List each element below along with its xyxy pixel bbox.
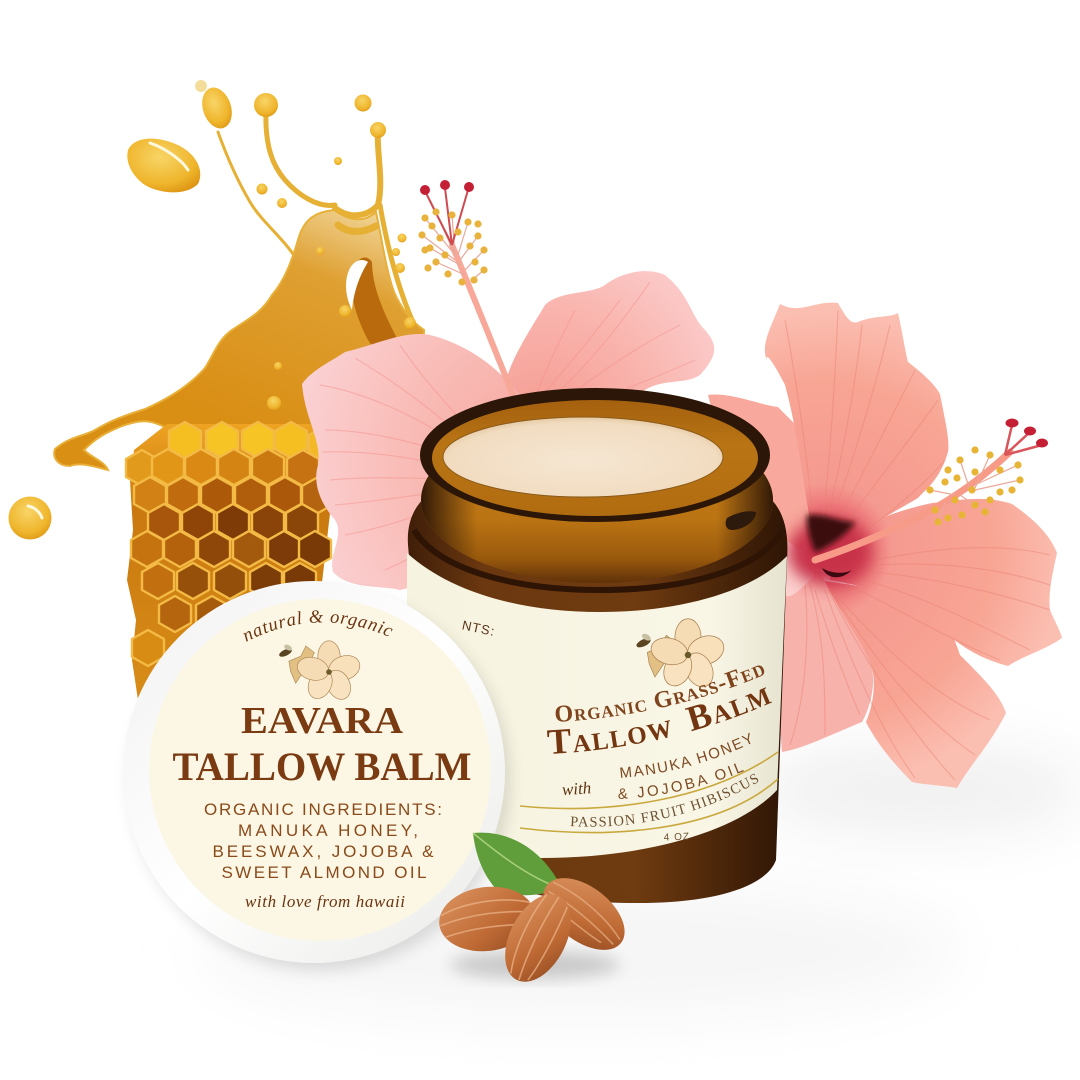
frill	[785, 540, 815, 596]
ingredients list: ORGANIC INGREDIENTS:	[204, 800, 442, 819]
jar body	[408, 488, 787, 903]
left hibiscus flower	[302, 180, 714, 590]
lid label	[149, 599, 491, 941]
brand name: EAVARA	[241, 700, 404, 742]
honey droplets	[195, 80, 416, 410]
honey highlight	[352, 258, 398, 355]
comb base	[127, 424, 345, 700]
text: jojoba oil: & JOJOBA OIL	[618, 763, 744, 799]
bottom petal	[818, 580, 1006, 788]
gold rule lines	[520, 752, 778, 832]
honeycomb	[126, 422, 345, 700]
heading: organic grass-fed: Organic Grass-Fed	[556, 666, 764, 722]
amber glass jar	[408, 388, 787, 903]
product name: TALLOW BALM	[172, 744, 472, 789]
neck thread	[726, 511, 756, 530]
honey splash	[8, 80, 424, 540]
petal veins	[785, 310, 1050, 780]
ingredients list	[204, 800, 442, 882]
upper right petal	[505, 271, 714, 430]
balm surface	[443, 417, 723, 497]
comb cells	[126, 422, 341, 666]
almond shadow	[450, 951, 620, 979]
heading: tallow balm: Tallow Balm	[547, 687, 772, 754]
left petal	[302, 334, 520, 590]
flower throat	[788, 514, 872, 586]
jar label	[407, 553, 787, 858]
jar lid	[126, 581, 514, 974]
text: with: with	[561, 778, 592, 799]
text: with love from hawaii: with love from hawaii	[245, 892, 405, 911]
stamen	[418, 180, 513, 395]
right hibiscus flower	[708, 303, 1062, 788]
text: manuka honey: MANUKA HONEY	[620, 732, 750, 778]
lower left petal	[770, 535, 873, 752]
large droplet	[127, 139, 200, 192]
almonds and leaf	[435, 833, 638, 993]
almond front	[492, 883, 584, 993]
lid shadow	[130, 590, 510, 970]
ingredients list: MANUKA HONEY,	[238, 821, 418, 840]
hidden label text: NTS:	[461, 617, 497, 639]
almond right	[530, 864, 638, 964]
text: natural and organic: natural & organic	[243, 610, 393, 642]
right petal	[830, 499, 1062, 666]
rear left petal	[708, 395, 823, 560]
icon: hibiscus and bee	[635, 619, 728, 691]
lid rim	[123, 581, 505, 963]
honey body	[54, 210, 424, 470]
text: passion fruit hibiscus: PASSION FRUIT HIBISCUS	[570, 774, 758, 827]
ingredients list: BEESWAX, JOJOBA &	[212, 842, 434, 861]
text: size: 4 OZ	[664, 832, 690, 843]
leaf	[473, 833, 562, 895]
label paper	[407, 553, 787, 858]
splash tendrils	[218, 112, 412, 320]
stamen	[815, 418, 1048, 560]
ground shadow	[200, 745, 1080, 1020]
almond left	[435, 881, 539, 957]
small droplet	[8, 496, 52, 540]
icon: hibiscus and bee	[278, 641, 363, 703]
petal veins	[320, 282, 695, 570]
jar rim	[420, 388, 770, 522]
ingredients list: SWEET ALMOND OIL	[222, 863, 426, 882]
jar neck	[421, 417, 773, 583]
top petal	[765, 303, 948, 550]
